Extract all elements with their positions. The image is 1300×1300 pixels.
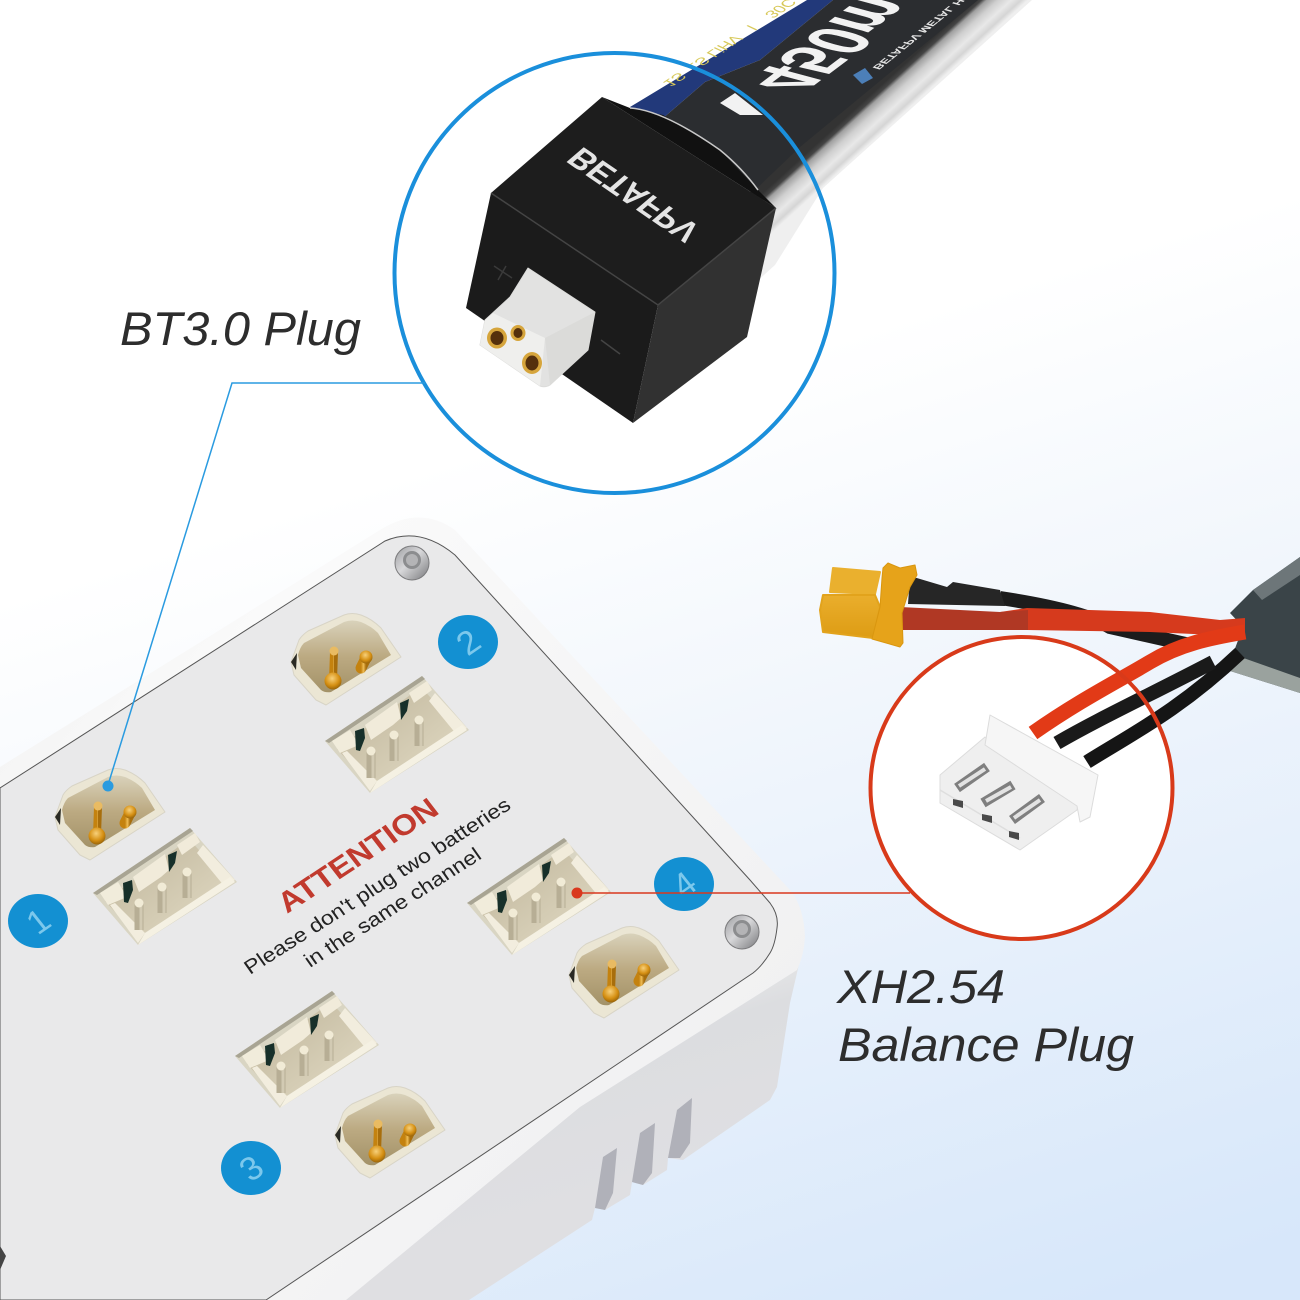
label: XH2.54 Balance Plug: XH2.54 <box>836 960 1005 1013</box>
battery tube <box>602 0 1032 283</box>
battery blue logo square <box>853 68 873 84</box>
callout: battery and BT3.0 plug <box>394 0 1032 493</box>
badge 1 <box>8 894 68 948</box>
badge 1: 1 <box>19 902 58 942</box>
badge 4 <box>654 857 714 911</box>
white balance connector <box>940 715 1098 850</box>
BT port 3 <box>335 1086 445 1178</box>
label: XH2.54 Balance Plug: Balance Plug <box>838 1018 1134 1071</box>
badge 2 <box>438 615 498 669</box>
minus mark <box>601 340 620 354</box>
balance port 3 <box>235 991 379 1108</box>
device side wall with vents <box>330 935 805 1300</box>
attention line 2: in the same channel <box>300 844 486 972</box>
plug contact holes <box>487 325 542 374</box>
attention heading: ATTENTION <box>271 792 445 920</box>
badge 2: 2 <box>449 623 488 663</box>
balance port 1 <box>93 828 237 945</box>
metal contacts <box>957 767 1042 820</box>
red leader line <box>572 888 910 898</box>
black cube plug housing <box>466 97 776 423</box>
white zoom disc <box>870 637 1172 939</box>
white zoom disc <box>394 53 834 493</box>
BT port 1 <box>55 768 165 860</box>
badge 4: 4 <box>665 865 704 905</box>
label: BT3.0 Plug: BT3.0 Plug <box>120 302 361 355</box>
balance port 4 <box>467 838 611 955</box>
BT port 4 <box>569 926 679 1018</box>
yellow XT30 connector <box>820 563 917 647</box>
badge 3: 3 <box>232 1149 271 1189</box>
battery label triangle <box>720 93 763 115</box>
balance wires <box>1033 632 1245 762</box>
attention line 1: Please don't plug two batteries <box>240 794 515 979</box>
screw bottom right <box>725 915 759 949</box>
plus mark <box>494 266 512 280</box>
red main lead <box>900 607 1245 635</box>
blue leader line <box>102 383 425 792</box>
white BT3.0 plug <box>480 268 595 387</box>
label: XH2.54 Balance Plug <box>836 960 1134 1071</box>
BT port 2 <box>291 614 401 705</box>
red ring <box>870 637 1172 939</box>
device aluminium plate <box>0 536 777 1300</box>
blue ring <box>394 53 834 493</box>
badge 3 <box>221 1141 281 1195</box>
callout: XT30 lead and XH2.54 plug <box>820 557 1300 939</box>
BETAFPV logo: BETAFPV <box>559 141 708 248</box>
socket holes <box>953 799 1019 840</box>
device top shell <box>0 518 805 1300</box>
black main lead <box>908 576 1190 645</box>
balance port 2 <box>325 676 469 793</box>
charger device <box>0 518 805 1300</box>
screw top <box>395 546 429 580</box>
battery end <box>1227 557 1300 693</box>
bottom-left edge detail <box>0 1246 6 1270</box>
